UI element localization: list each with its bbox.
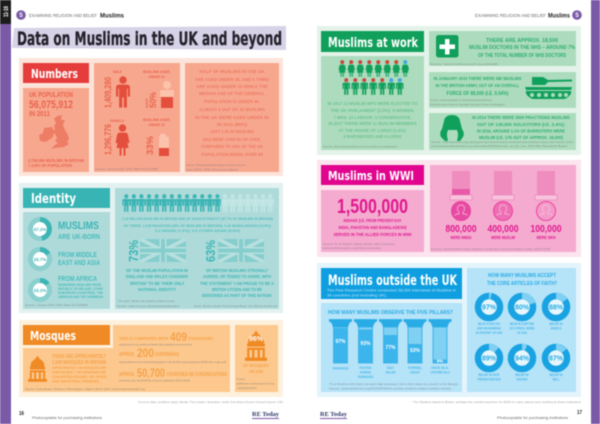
ethnicity and national identity box: THE STATEMENT 'I AM PROUD TO BE A bbox=[200, 281, 274, 286]
synagogues statistic: 409 bbox=[170, 330, 187, 344]
five pillars chart box: SHAHADA bbox=[332, 366, 349, 370]
pillar: salah 77%: 77% bbox=[385, 345, 396, 351]
mosques text box: www.brin.ac.uk/2018/uk-church-statistics-2010-2020 bbox=[119, 378, 190, 382]
articles of faith box: AS LITERAL WORD bbox=[510, 326, 535, 330]
page header right: EXAMINING RELIGION AND BELIEF bbox=[475, 13, 546, 18]
ethnicity and national identity box: OF THE MUSLIM POPULATION IN bbox=[126, 268, 188, 273]
ethnicity and national identity box: Source: www.ons.gov.uk/peoplepopulationand bbox=[117, 304, 179, 308]
Sunni mosques box: galleries.muslimcouncil.org bbox=[236, 382, 275, 386]
UK population box bbox=[23, 88, 89, 172]
1,500,000 box: Source: Dr Ali Muslim, British Muslim War Centenary bbox=[323, 242, 396, 246]
chart: 15.2% Africa donut: 15.2% bbox=[34, 288, 46, 293]
five pillars chart box: ZAKAT bbox=[410, 370, 421, 374]
Sunni mosques box: 96% bbox=[249, 336, 264, 343]
armed forces box: FORCE OF 88,500 (I.E. 0.54%) bbox=[446, 91, 509, 97]
outside UK heading bbox=[321, 268, 462, 299]
WWI heading bbox=[321, 165, 424, 185]
armed forces box: Source: www.telegraph.co.uk/news/uknews/defence bbox=[430, 98, 492, 102]
icon: man bbox=[116, 76, 130, 108]
medals box bbox=[430, 165, 576, 252]
articles of faith box: ANGELS bbox=[550, 326, 562, 330]
icon: barrister wig bbox=[440, 115, 464, 141]
churches statistic: CHURCHES OR CONGREGATIONS bbox=[167, 372, 227, 378]
doctors box: THERE ARE APPROX. 18,500 bbox=[486, 38, 558, 44]
legal professions box: MUSLIM (I.E. 176 OUT OF APPROX. 16,000) bbox=[479, 135, 563, 141]
legal professions box: www.barstandardsboard.org.uk/media/1823/diversity_at_the_bar_2016 Bar Standards Board bbox=[431, 144, 567, 148]
age statistics text box: IN 2011 (88%) bbox=[217, 122, 248, 127]
identity heading: Identity bbox=[31, 192, 76, 207]
five pillars chart box: ONCE-IN-A- bbox=[431, 366, 450, 370]
articles of faith box: THE CORE ARTICLES OF FAITH? bbox=[487, 281, 557, 287]
ethnicity and national identity box: BRITISH CITIZEN AND TO BE bbox=[212, 287, 262, 292]
pictogram: MPs women and men bbox=[339, 60, 409, 95]
birthplace box: EUROPEAN COUNTRIES, THE bbox=[58, 291, 104, 295]
churches statistic: 50,700 bbox=[137, 366, 165, 380]
demographic figures box: MUSLIMS AGED bbox=[143, 117, 170, 122]
right purple side bar bbox=[591, 0, 600, 424]
outside UK heading: The Pew Research Centre conducted 38,000 interviews of Muslims in bbox=[327, 288, 456, 292]
age statistics text box: JUST 1 IN 25 MUSLIMS bbox=[210, 129, 254, 134]
churches statistic bbox=[119, 366, 227, 380]
birthplace box: EAST AND ASIA bbox=[58, 258, 100, 267]
1,500,000 box: SERVED IN THE ALLIED FORCES IN WWI bbox=[334, 232, 412, 237]
mosques text box: www.bod.org.uk/bod-facts-life-jewish-community bbox=[119, 342, 193, 346]
demographic figures box: FEMALE bbox=[110, 118, 124, 123]
icon: mosque bbox=[28, 355, 47, 382]
Sunni mosques box: OF MOSQUES bbox=[243, 363, 269, 368]
pillar: zakat 53% bbox=[404, 319, 426, 363]
age statistics text box: ARE AGED UNDER 25, AND A THIRD bbox=[195, 77, 270, 82]
ethnicity and national identity box: 2.33 MILLION MUSLIMS IN BRITAIN ARE OF ASIAN ETHNICITY (67.7% OF MUSLIMS IN BRITAIN) bbox=[122, 217, 273, 221]
outside UK heading: 39 countries (not including UK). bbox=[327, 292, 387, 298]
five pillars chart box: SALAH bbox=[386, 370, 396, 374]
birthplace box: ARE UK-BORN bbox=[58, 232, 100, 241]
icon: woman bbox=[116, 124, 130, 156]
icon: union flag 73% bbox=[140, 239, 186, 262]
page header right bbox=[475, 10, 582, 20]
legal professions box: IN 2014 THERE WERE 3000 PRACTISING MUSLIMS bbox=[472, 115, 571, 121]
panel: mosques bbox=[19, 320, 283, 397]
photocopiable note left: Photocopiable for purchasing institutions bbox=[32, 416, 102, 420]
age statistics text box bbox=[185, 63, 279, 172]
1,500,000 box: INDIANS (I.E. FROM PRESENT-DAY bbox=[344, 218, 402, 223]
gurdwaras statistic: APPROX. bbox=[119, 352, 135, 358]
articles of faith box bbox=[467, 268, 576, 392]
demographic figures box: 1,296,776 bbox=[103, 124, 113, 155]
UK population box: IN 2011 bbox=[29, 111, 50, 118]
ethnicity and national identity box: IDENTIFIED AS PART OF THIS NATION' bbox=[202, 293, 272, 298]
title: Data on Muslims in the UK and beyond bbox=[17, 28, 282, 50]
left purple side bar bbox=[0, 24, 11, 424]
gurdwaras statistic: 200 bbox=[137, 346, 154, 360]
ethnicity and national identity box: 63% bbox=[203, 240, 218, 262]
1,500,000 box bbox=[321, 190, 424, 252]
ethnicity and national identity box: OF BRITISH MUSLIMS STRONGLY bbox=[206, 268, 268, 273]
identity heading bbox=[23, 188, 110, 208]
articles of faith box: BELIEF IN bbox=[550, 373, 563, 377]
mosques text box: THERE ARE APPROXIMATELY bbox=[52, 354, 106, 360]
medal: 400,000 Muslim bbox=[488, 171, 519, 240]
mosques text box: 1,500 MOSQUES IN BRITAIN bbox=[52, 360, 106, 366]
five pillars chart box: Source: www.pewforum.org/2013/04/30/the-worlds-muslims-religion-politics-society bbox=[329, 386, 452, 390]
panel: Muslims in WWI bbox=[317, 160, 581, 257]
pillar: Shahada 97%: 97% bbox=[335, 339, 346, 345]
five pillars chart box: *% of Muslims who have met each Hajj necessary; this is their deep into country is the lifestyle bbox=[329, 382, 458, 386]
UK population box: = 4.8% OF POPULATION bbox=[28, 163, 72, 168]
1,500,000 box: INDIA, PAKISTAN AND BANGLADESH) bbox=[338, 225, 407, 230]
mosques text box bbox=[20, 322, 230, 392]
mosques text box: APPROXIMATELY 330 MOSQUES ARE bbox=[52, 366, 107, 370]
gurdwaras statistic: GURDWARAS bbox=[155, 352, 179, 358]
age statistics text box: MEDIAN AGE OF THE GENERAL bbox=[199, 91, 265, 96]
articles of faith box: BELIEF IN ONE GOD bbox=[478, 322, 500, 326]
demographic figures box: 33% bbox=[145, 136, 155, 155]
panel: Muslims at work bbox=[317, 26, 581, 155]
1,500,000 box: 1,500,000 bbox=[337, 196, 408, 218]
panel: identity bbox=[19, 183, 283, 313]
doctors box bbox=[429, 31, 576, 66]
five pillars chart box: DURING bbox=[360, 370, 371, 374]
age statistics text box: ssion 2016, ONS Census at a glance bbox=[186, 168, 238, 172]
demographic figures box: MUSLIMS AGED bbox=[143, 69, 170, 74]
articles of faith box: HOW MANY MUSLIMS ACCEPT bbox=[488, 273, 556, 279]
MPs box: Source: www.theyworkforyou.com/muslims-in-parliament bbox=[323, 144, 397, 148]
UK population box: UK POPULATION bbox=[29, 92, 73, 99]
chart: 47.2% UK-born donut: 47.2% bbox=[34, 227, 46, 232]
page header left: Muslims bbox=[100, 14, 125, 20]
birthplace box: REMAINING MUSLIMS FROM bbox=[58, 283, 101, 287]
demographic figures box: MALE bbox=[113, 69, 122, 74]
medal: 800,000 Hindu bbox=[446, 171, 477, 240]
articles of faith box: 88% bbox=[549, 304, 564, 312]
articles of faith box: BELIEF IN bbox=[550, 322, 563, 326]
birthplace box: FROM MIDDLE bbox=[58, 250, 97, 259]
Sunni mosques box: ARE SUNNI bbox=[249, 369, 263, 374]
mosques heading bbox=[23, 325, 110, 345]
armed forces box bbox=[429, 72, 576, 108]
Sunni mosques box bbox=[235, 325, 278, 392]
birthplace box: AMERICAS AND THE CARIBBEAN bbox=[58, 295, 103, 299]
ethnicity and national identity box: OF THESE, 1,028 PAKISTANI (38% OF MUSLIMS IN BRITAIN); 0.40 BANGLADESHI (14.9%); bbox=[124, 224, 272, 228]
five pillars chart box: RAMADAN bbox=[358, 375, 373, 379]
MPs box: IN 2017 13 MUSLIM MPS WERE ELECTED TO bbox=[328, 101, 418, 107]
articles of faith box: BELIEF IN FATE bbox=[478, 373, 500, 377]
mosques text box: PURPOSE BUILT; THE REMAINDER ARE bbox=[52, 370, 107, 374]
legal professions box: OUT OF 130,000 SOLICITORS (I.E. 2.4%); bbox=[477, 122, 565, 128]
demographic figures box: 1,409,280 bbox=[103, 77, 113, 108]
MPs box: IN 2017 THERE WERE 11 MUSLIM MEMBERS bbox=[328, 121, 417, 127]
synagogues statistic: THIS IS COMPARED WITH bbox=[119, 336, 168, 342]
synagogues statistic: SYNAGOGUES bbox=[188, 336, 214, 342]
age statistics text box: IN THE UK WERE AGED UNDER 50 bbox=[195, 115, 269, 120]
age statistics text box: POPULATION BEING OVER 65 bbox=[201, 152, 263, 157]
five pillars chart box bbox=[321, 303, 462, 392]
legal professions box: IN 2016, AROUND 1.1% OF BARRISTERS WERE bbox=[477, 128, 566, 134]
synagogues statistic bbox=[119, 330, 214, 344]
articles of faith box: HEAVEN bbox=[516, 378, 528, 382]
mosques text box: www.sikhnet.com/news/sangat-in-uk-british-gurudwaras-2015-list-map-pdf bbox=[119, 360, 226, 364]
UK population box: 56,075,912 bbox=[29, 99, 73, 111]
mosques heading: Mosques bbox=[30, 328, 76, 343]
ethnicity and national identity box: Source: 'Muslims in Britain' Policy Exchange Report, June 2016 and ComRes poll bbox=[194, 304, 277, 308]
mosques text box: Source: Innes Bowen 'Medina in Birmingham, Najaf in Brent' 2014; www.muslimsinbritain.org bbox=[25, 387, 145, 391]
age statistics text box: POPULATION IS UNDER 40. bbox=[204, 99, 260, 104]
birthplace box: MUSLIMS bbox=[58, 220, 99, 232]
work heading bbox=[321, 31, 424, 52]
pillar: fasting 93% bbox=[354, 319, 377, 363]
medal: 800,000 Hindu: 800,000 bbox=[446, 224, 477, 235]
demographic figures box: UNDER 15 bbox=[148, 122, 165, 127]
doctors box: OF THE TOTAL NUMBER OF NHS DOCTORS bbox=[478, 53, 567, 59]
age statistics text box: COMPARED TO 16% OF THE UK bbox=[201, 144, 264, 149]
articles of faith box: OF GOD bbox=[517, 331, 527, 335]
pillar: Shahada 97% bbox=[329, 319, 352, 363]
medal: 400,000 Muslim: WERE MUSLIM bbox=[491, 235, 515, 240]
birthplace box bbox=[23, 212, 110, 309]
MPs box bbox=[321, 56, 424, 150]
churches statistic: APPROX. bbox=[119, 372, 135, 378]
page header left: 5 bbox=[19, 13, 23, 19]
pillar: hajj 9%: 9% bbox=[437, 358, 443, 364]
demographic figures box: 50% bbox=[148, 92, 158, 108]
articles of faith box: 97% bbox=[482, 304, 497, 312]
page header left: EXAMINING RELIGION AND BELIEF bbox=[29, 13, 97, 18]
ethnicity and national identity box: 0.2 INDIAN (7.3%); 0.5 OTHER ASIAN (6.6%) bbox=[155, 229, 240, 233]
legal professions box: Source: www.lawsociety.org.uk/support-services/research-trends/annual-statistics-report Law Society 2014 bbox=[431, 140, 573, 144]
demographic figures box bbox=[94, 63, 180, 172]
MPs box: 7 MEN. 13 LABOUR; 3 CONSERVATIVE. bbox=[334, 115, 412, 121]
articles of faith box: BELIEF IN bbox=[516, 373, 529, 377]
medal: 100,000 Sikh bbox=[530, 171, 562, 240]
articles of faith box: AND MUHAMMAD bbox=[477, 326, 501, 330]
page number 17: 17 bbox=[577, 410, 582, 416]
mosques text box: AND INDUSTRIAL PREMISES bbox=[52, 380, 100, 384]
Sunni mosques box: .uk/2011/2014 bbox=[236, 386, 257, 390]
legal professions box bbox=[429, 113, 576, 150]
icon: child half filled bbox=[160, 81, 174, 108]
icon: union flag 63% bbox=[218, 239, 264, 262]
articles of faith box: 87% bbox=[549, 356, 564, 362]
articles of faith box: AS PROPHET OF GOD bbox=[476, 331, 503, 335]
work heading: Muslims at work bbox=[328, 36, 418, 51]
age statistics text box: ALMOST 9 OUT OF 10 MUSLIMS bbox=[199, 107, 265, 112]
gurdwaras statistic bbox=[119, 346, 179, 360]
doctors box: MUSLIM DOCTORS IN THE NHS – AROUND 7% bbox=[469, 45, 576, 51]
ethnicity and national identity box: AGREED, OR TENDED TO AGREE, WITH bbox=[203, 274, 271, 279]
ethnicity and national identity box bbox=[115, 188, 279, 309]
demographic figures box: UNDER 24 bbox=[148, 74, 165, 79]
title bbox=[12, 26, 286, 50]
age range tab bbox=[0, 0, 11, 24]
pillar: fasting 93%: 93% bbox=[360, 341, 371, 347]
panel: Muslims outside the UK bbox=[317, 263, 581, 397]
RE Today logo left: RE Today bbox=[252, 411, 280, 418]
articles of faith box: 80% bbox=[515, 304, 530, 312]
icon: small child one third filled bbox=[159, 134, 169, 156]
medals box: Source: www.britishmuslim.org/ww1-centenary-commemoration-video-2014-2018 bbox=[431, 247, 550, 251]
pictogram: people row, 13 of 20 dark bbox=[122, 194, 274, 212]
birthplace box: Source: Census 2011 ONS Table DC2205EW bbox=[25, 303, 88, 307]
icon: tank bbox=[525, 77, 572, 99]
articles of faith box: BELIEF IN SCRIPTURE bbox=[510, 322, 534, 326]
RE Today logo right: RE Today bbox=[320, 411, 348, 418]
pillar: salah 77% bbox=[379, 319, 402, 363]
age statistics text box: HALF OF MUSLIMS IN THE UK bbox=[200, 69, 265, 74]
Sunni mosques box: Source: bbox=[236, 377, 246, 381]
1,500,000 box: www.britishmuslim.org/ww1-centenary bbox=[323, 246, 382, 250]
MPs box: AT THE HOUSE OF LORDS (1.4%); bbox=[338, 128, 407, 134]
numbers heading bbox=[23, 63, 89, 83]
icon: medical cross bbox=[436, 35, 458, 58]
pillar: zakat 53%: 53% bbox=[410, 348, 421, 354]
articles of faith box: 94% bbox=[515, 356, 530, 362]
birthplace box: REPUBLIC OF IRELAND, OTHER bbox=[58, 287, 103, 291]
articles of faith box: PREDESTINATION bbox=[478, 378, 501, 382]
icon: UK map bbox=[39, 115, 69, 149]
armed forces box: Muslims-army-fears-of-reprisals-Sunday-Times-investigation bbox=[430, 102, 505, 106]
five pillars chart box: FORMAL bbox=[408, 366, 423, 370]
birthplace box: FROM AFRICA bbox=[58, 274, 97, 283]
five pillars chart box: LIFETIME HAJJ bbox=[430, 370, 450, 374]
photocopiable note right: Photocopiable for purchasing institutions bbox=[497, 416, 568, 420]
age statistics text box: ARE AGED UNDER 15 WHILE THE bbox=[196, 84, 268, 89]
numbers heading: Numbers bbox=[31, 66, 78, 81]
outside UK heading: Muslims outside the UK bbox=[328, 273, 458, 289]
WWI heading: Muslims in WWI bbox=[328, 169, 414, 183]
MPs box: 5 BARONESSES AND 6 LORDS bbox=[344, 134, 402, 140]
articles of faith box: HELL bbox=[552, 378, 560, 382]
footnote right: * For Muslims based in Britain, perhaps the overall proportion for 2018 (in many cases) were working at these institutions bbox=[412, 400, 582, 404]
medal: 800,000 Hindu: WERE HINDU bbox=[450, 235, 472, 240]
ethnicity and national identity box: 73% bbox=[126, 240, 141, 262]
ethnicity and national identity box: * the option 'Welsh' was added for Wales Census bbox=[117, 299, 175, 303]
MPs box: THE UK PARLIAMENT (2.3%); 8 WOMEN, bbox=[330, 108, 415, 114]
age statistics text box: (4%) WERE OVER 65 OR OVER, bbox=[203, 137, 261, 142]
ethnicity and national identity box: NATIONAL IDENTITY bbox=[138, 287, 176, 292]
articles of faith box: 89% bbox=[482, 356, 497, 362]
page header right: Muslims bbox=[548, 14, 571, 20]
chart: 16.7% Middle East and Asia donut: 16.7% bbox=[34, 257, 46, 262]
five pillars chart box: HOW MANY MUSLIMS OBSERVE THE FIVE PILLARS? bbox=[328, 310, 453, 316]
chart: belief donuts top row bbox=[478, 296, 567, 318]
pillar: hajj 9% bbox=[428, 319, 452, 364]
mosques text box: CONVERTED HOUSES, OR OFFICE bbox=[52, 375, 108, 379]
page header left bbox=[16, 10, 125, 20]
panel: numbers bbox=[19, 58, 283, 176]
demographic figures box: Source: Census 2011 ONS Table DC2107EW bbox=[95, 167, 158, 171]
age range tab: 11-16 bbox=[4, 6, 10, 17]
ethnicity and national identity box: 'BRITISH' TO BE THEIR ONLY bbox=[130, 281, 185, 286]
UK population box: 2,706,066 MUSLIMS IN BRITAIN bbox=[28, 158, 84, 163]
chart: belief donuts bottom row bbox=[478, 347, 567, 369]
medal: 100,000 Sikh: WERE SIKH bbox=[536, 235, 556, 240]
five pillars chart box: DAILY bbox=[387, 366, 394, 370]
age statistics text box: Source: Missing Muslims Report Citizens Comm. bbox=[186, 163, 246, 167]
armed forces box: IN THE BRITISH ARMY, OUT OF AN OVERALL bbox=[436, 83, 520, 89]
medal: 400,000 Muslim: 400,000 bbox=[488, 224, 519, 235]
demographic figures box: ALMOST bbox=[145, 97, 149, 108]
medal: 100,000 Sikh: 100,000 bbox=[530, 224, 562, 235]
doctors box: Source: www.muslimcouncil.org.uk/health bbox=[430, 62, 498, 66]
page header right: 5 bbox=[575, 13, 579, 19]
armed forces box: IN JANUARY 2015 THERE WERE 480 MUSLIMS bbox=[434, 76, 522, 82]
page number 16: 16 bbox=[19, 411, 24, 417]
copyright footnote left: Common data, conditions apply, Identity. This creation, illustration, credit: Free Expert Source Council Licence: CSS bbox=[138, 400, 283, 404]
ethnicity and national identity box: ENGLAND AND WALES CONSIDER bbox=[126, 274, 189, 279]
five pillars chart box: FASTING bbox=[360, 366, 372, 370]
